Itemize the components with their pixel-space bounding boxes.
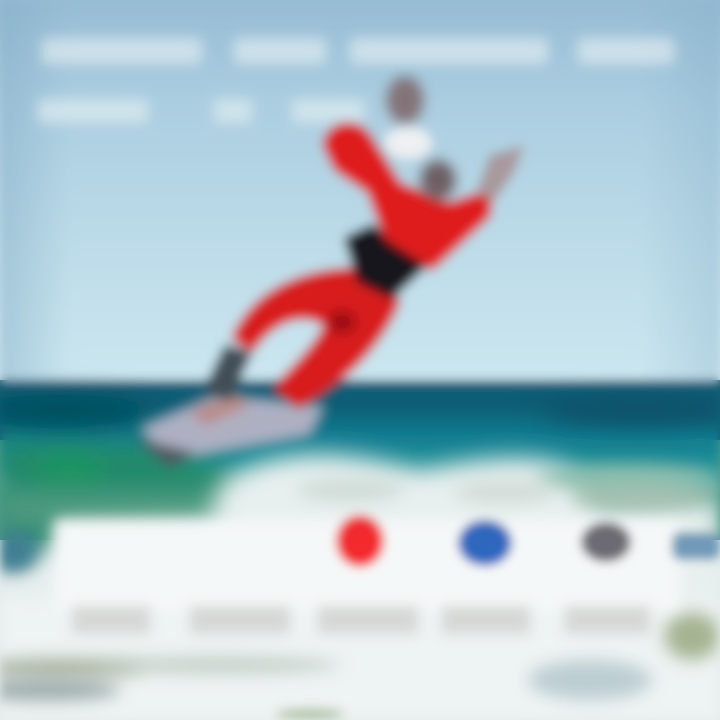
kitesurfer figure — [135, 76, 524, 468]
lower leg — [203, 345, 252, 400]
harness — [345, 225, 430, 298]
foam and surf — [0, 455, 720, 720]
head and arm — [384, 76, 524, 200]
red dot — [336, 515, 384, 567]
board — [135, 392, 325, 468]
light blue block — [672, 532, 720, 560]
red jacket — [323, 123, 492, 270]
blue dot — [458, 520, 512, 566]
sea band — [0, 380, 720, 490]
shaded crotch — [328, 311, 356, 333]
legend labels — [72, 606, 650, 634]
gray dot — [581, 522, 631, 562]
sky background — [0, 0, 720, 400]
red trousers — [232, 268, 400, 408]
panel: white legend strip — [55, 520, 680, 610]
title (heavily blurred) — [38, 38, 674, 123]
green water on the left — [0, 440, 240, 574]
legend row: colored dots — [55, 515, 720, 634]
